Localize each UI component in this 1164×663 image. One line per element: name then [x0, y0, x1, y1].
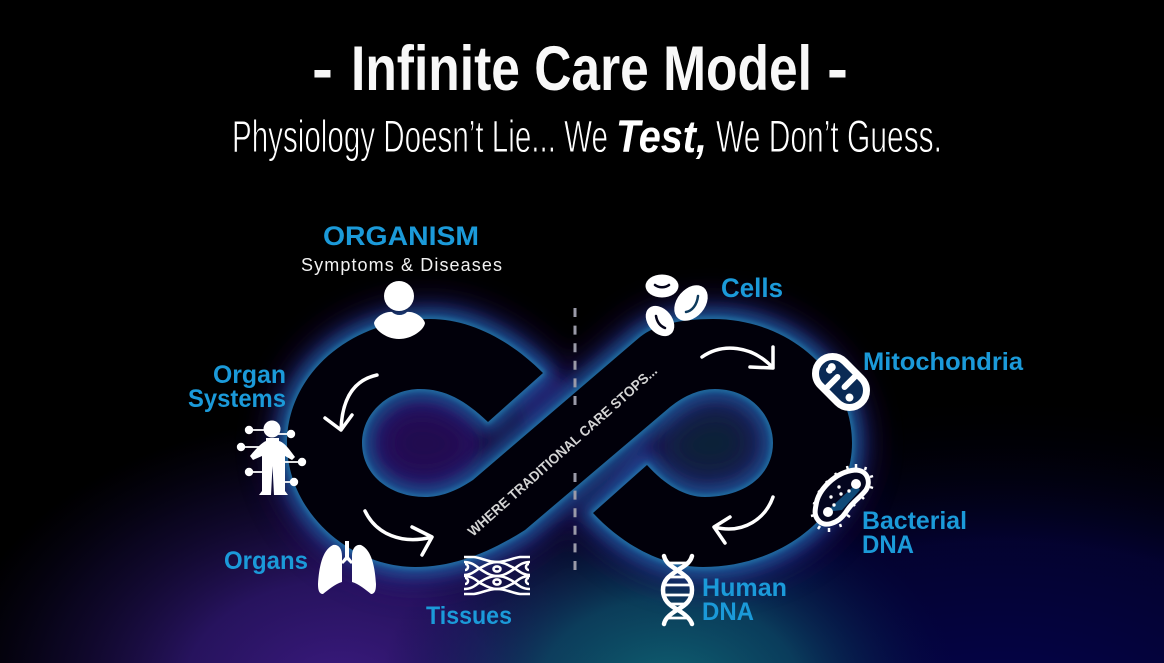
- icon: cells: [640, 274, 715, 342]
- label: mitochondria: Mitochondria: [863, 348, 1024, 376]
- arrow: bacterial dna to human dna: [714, 497, 773, 543]
- subtitle: Test,: [616, 111, 707, 162]
- label: organ systems: Organ: [213, 361, 286, 389]
- label: tissues: Tissues: [426, 602, 512, 630]
- subtitle: Physiology Doesn’t Lie... We: [232, 111, 608, 162]
- label: organism: Symptoms & Diseases: [301, 255, 502, 275]
- infinity loop inner glow: [367, 340, 768, 540]
- infinity loop band: [287, 319, 852, 567]
- icon: tissues: [464, 557, 530, 594]
- label: organ systems: Systems: [188, 385, 286, 413]
- title: -: [827, 34, 848, 104]
- divider: upper dashed line: [574, 308, 576, 405]
- icon: lungs: [318, 541, 376, 594]
- arrow: cells to mitochondria: [702, 347, 773, 368]
- label: human dna: Human: [702, 574, 787, 602]
- icon: body with organ system nodes: [237, 420, 306, 495]
- title: -: [312, 34, 333, 104]
- label: bacterial dna: Bacterial: [862, 507, 967, 535]
- label: organs: Organs: [224, 547, 308, 575]
- label: organism: ORGANISM: [323, 221, 479, 251]
- arrow: organ systems down: [325, 375, 377, 430]
- icon: person: [374, 281, 425, 339]
- label: cells: Cells: [721, 273, 783, 303]
- label: organ systems: [188, 361, 286, 413]
- icon: dna helix: [663, 556, 692, 624]
- label: bacterial dna: [862, 507, 967, 559]
- label: organism: [301, 221, 502, 275]
- divider: lower dashed line: [574, 473, 576, 570]
- label: human dna: DNA: [702, 598, 754, 626]
- icon: bacteria: [811, 464, 873, 532]
- label: bacterial dna: DNA: [862, 531, 914, 559]
- subtitle: We Don’t Guess.: [716, 111, 942, 162]
- label: human dna: [702, 574, 787, 626]
- diagonal caption: WHERE TRADITIONAL CARE STOPS...: [464, 362, 660, 539]
- title: Infinite Care Model: [351, 34, 812, 104]
- icon: mitochondria: [808, 349, 874, 415]
- infinity loop glow: [287, 319, 852, 567]
- arrow: organs to tissues: [365, 511, 432, 555]
